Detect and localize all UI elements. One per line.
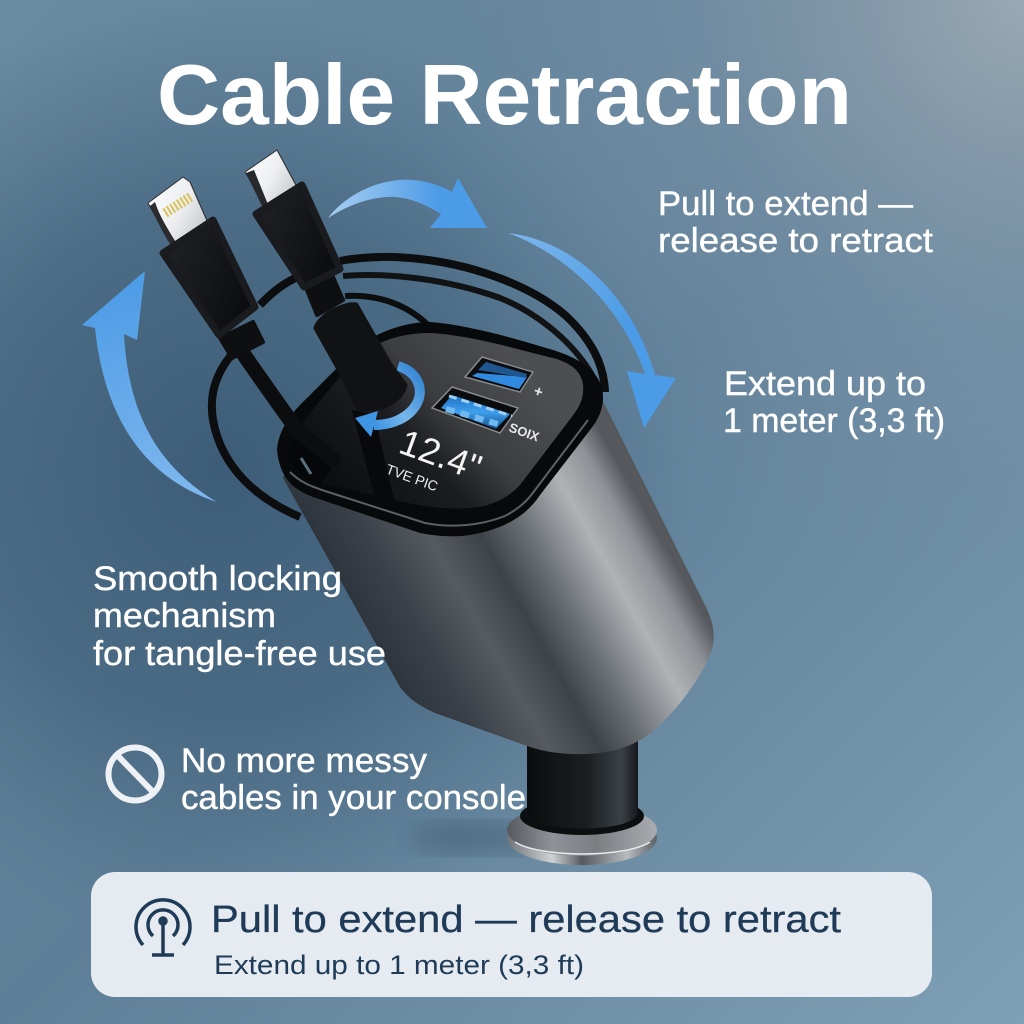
callout: locking mechanism: Smooth locking xyxy=(93,560,342,598)
top face panel xyxy=(293,333,583,508)
arrow: left curved xyxy=(82,271,217,502)
rear cable strand xyxy=(343,275,592,375)
USB port 2 xyxy=(432,387,518,433)
rear cable loop xyxy=(260,257,605,392)
arrow: top curved xyxy=(328,178,487,228)
blue rotation ring xyxy=(355,366,420,437)
icon: signal antenna xyxy=(136,900,190,955)
connector: lightning xyxy=(148,177,263,358)
icon: prohibited xyxy=(108,748,162,800)
callout: extend length xyxy=(723,365,945,440)
panel: bottom summary xyxy=(91,872,932,997)
digital display: 12.4" xyxy=(394,421,487,488)
callout: locking mechanism: for tangle-free use xyxy=(93,635,386,673)
product: car charger xyxy=(148,150,714,865)
front cable xyxy=(242,352,333,460)
port label: SOIX xyxy=(507,420,542,445)
callout: pull to extend xyxy=(658,185,934,260)
callout: locking mechanism xyxy=(93,560,386,673)
panel heading: Pull to extend — release to retract xyxy=(211,899,841,941)
callout: extend length: 1 meter (3,3 ft) xyxy=(723,402,945,440)
callout: pull to extend: release to retract xyxy=(658,222,934,260)
arrow: right curved xyxy=(508,233,676,428)
top face rim xyxy=(277,322,603,536)
display caption: TVE PIC xyxy=(384,461,440,494)
base post xyxy=(507,735,657,865)
cable slot xyxy=(288,438,340,486)
rear left loop xyxy=(212,353,300,517)
callout: no messy cables xyxy=(181,742,526,817)
callout: extend length: Extend up to xyxy=(724,365,926,403)
panel subtext: Extend up to 1 meter (3,3 ft) xyxy=(214,950,584,980)
port label plus: + xyxy=(532,383,545,401)
charger body xyxy=(283,340,714,754)
small rear loop xyxy=(345,296,428,325)
title: Cable Retraction xyxy=(157,48,852,143)
callout: no messy cables: No more messy xyxy=(181,742,427,780)
lower grommet xyxy=(316,305,405,409)
callout: no messy cables: cables in your console xyxy=(181,779,526,817)
callout: pull to extend: Pull to extend — xyxy=(658,185,913,223)
callout: locking mechanism: mechanism xyxy=(93,597,276,635)
USB port 1 xyxy=(465,357,533,392)
connector: USB-C xyxy=(245,150,343,315)
rim highlight xyxy=(290,420,588,526)
gloss wedge xyxy=(352,410,394,500)
